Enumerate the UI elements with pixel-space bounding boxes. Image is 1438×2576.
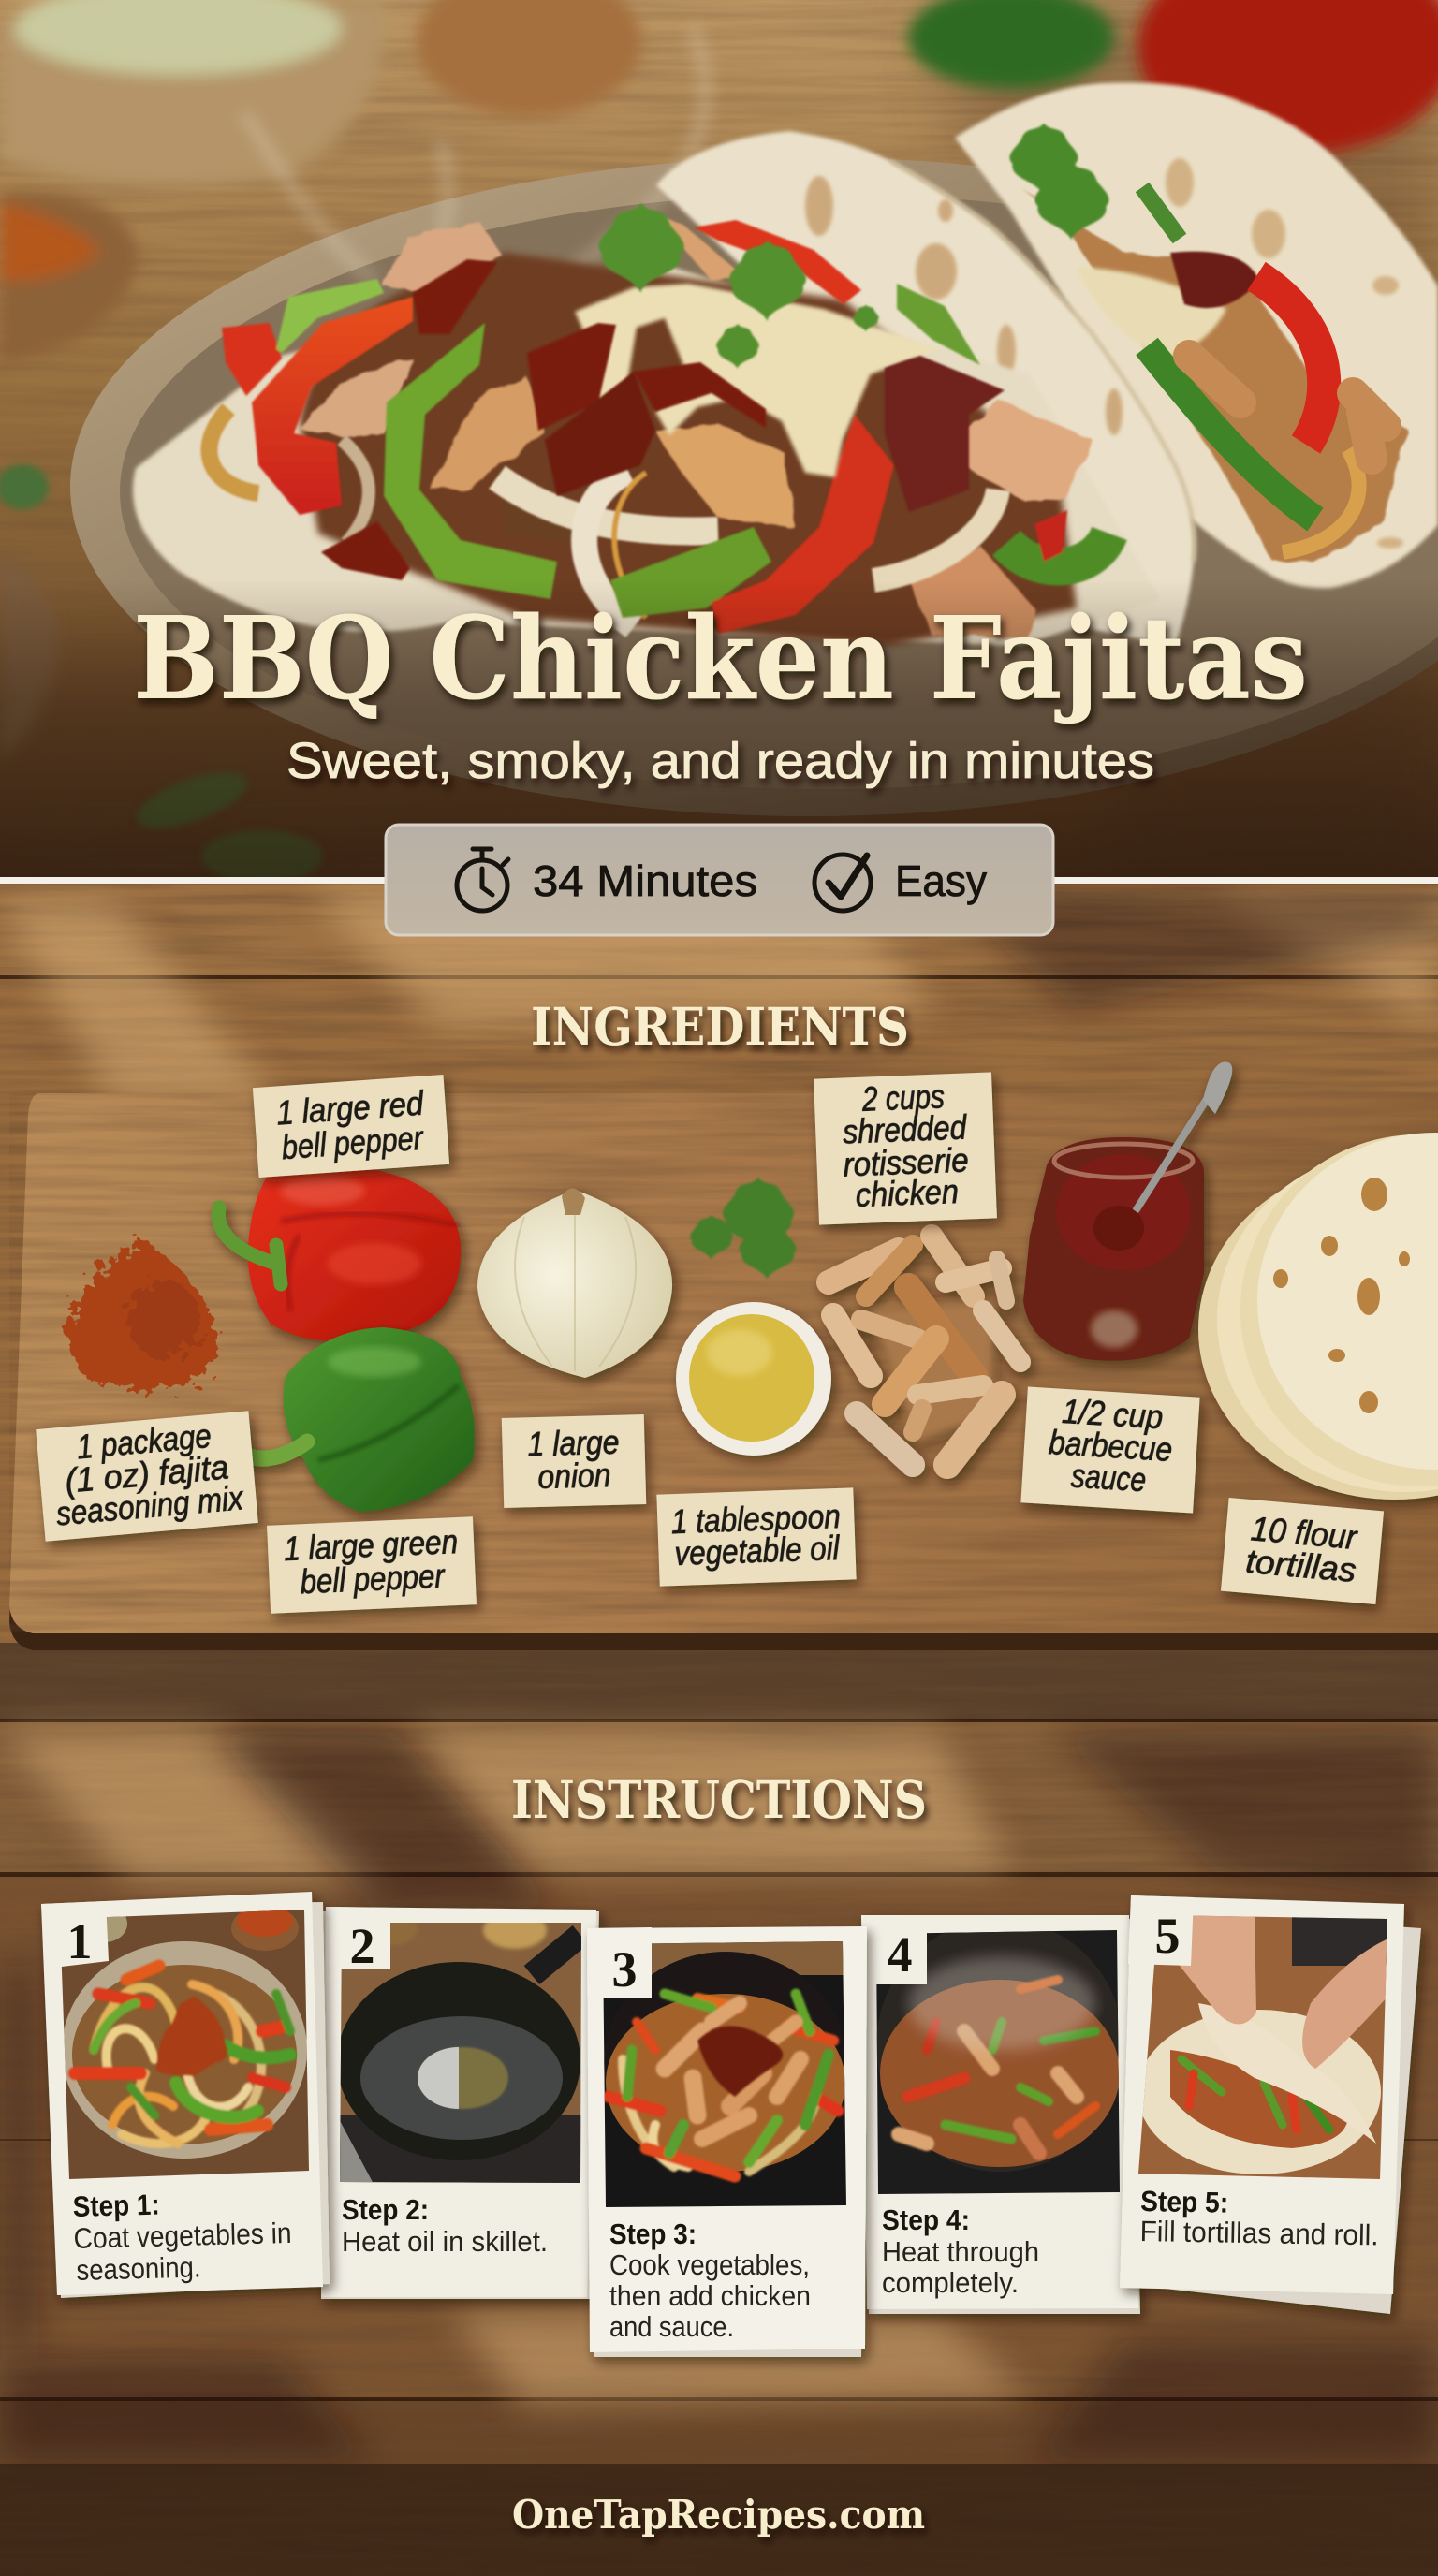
step 1 text: seasoning. [76,2250,201,2287]
icon: stopwatch [457,849,508,911]
panel: wood backdrop [0,880,1438,2576]
ingredient: shredded chicken [829,1236,1020,1465]
step 3 text: then add chicken [609,2279,811,2312]
subtitle: Sweet, smoky, and ready in minutes [286,733,1154,789]
divider line [0,877,1438,884]
step 1 text: Step 1: [72,2188,160,2223]
panel: cutting board [9,1093,1438,1650]
heading: instructions: INSTRUCTIONS [511,1769,927,1830]
note: flour tortillas: 10 flour [1250,1509,1360,1557]
note: onion [502,1414,646,1508]
step 3 text: Cook vegetables, [609,2248,810,2281]
step 2 text [342,2193,548,2258]
note: green bell pepper: 1 large green [283,1522,459,1568]
panel: step 5 card [1120,1895,1421,2314]
steam [243,28,705,374]
photo: chicken and sauce in pan [599,1938,850,2211]
chicken shreds [297,215,1093,637]
badge: time and difficulty [386,825,1053,935]
ingredient: fajita seasoning pile [66,1240,216,1391]
footer band [0,2464,1438,2576]
background props [0,0,1438,758]
cilantro garnish [598,203,879,369]
fajita filling [210,215,1109,646]
foreground leaves [0,464,323,883]
back tortilla taco [955,82,1438,588]
note: rotisserie chicken: shredded [842,1107,968,1151]
pepper stem [218,1208,281,1284]
panel: step 2 card [321,1907,599,2299]
note: rotisserie chicken: chicken [855,1172,960,1214]
photo: seasoned vegetables bowl [56,1905,314,2186]
note: fajita seasoning: (1 oz) fajita [64,1447,230,1500]
number 3: 3 [612,1941,637,1998]
sunlight streaks [0,889,1438,2406]
panel: step 3 card [587,1926,867,2357]
tag: number 4 [861,1915,927,1984]
spoon [1137,1086,1215,1209]
step 2 text: Heat oil in skillet. [342,2225,548,2258]
difficulty label: Easy [895,856,987,905]
ingredient: barbecue sauce jar [1023,1061,1232,1361]
note: fajita seasoning: seasoning mix [54,1478,246,1533]
ingredient: onion [477,1188,672,1378]
step 1 text [72,2185,293,2287]
photo: hot skillet [337,1911,585,2186]
ingredient: cilantro sprig [690,1178,796,1280]
note: flour tortillas [1221,1498,1384,1604]
photo: heating stew in skillet [871,1919,1123,2200]
note: fajita seasoning [36,1411,258,1542]
note: rotisserie chicken: 2 cups [860,1076,946,1119]
tag: number 1 [41,1901,109,1969]
photo: rolling tortilla [1133,1910,1395,2186]
note: green bell pepper [267,1516,477,1614]
step 5 text [1139,2185,1379,2251]
step 3 text: and sauce. [609,2310,734,2343]
number 5: 5 [1155,1908,1180,1964]
number 1: 1 [67,1913,92,1969]
note: green bell pepper: bell pepper [300,1557,447,1601]
panel: step 4 card [861,1915,1140,2314]
note: flour tortillas: tortillas [1244,1542,1357,1589]
note: barbecue sauce: barbecue [1048,1423,1173,1469]
ingredient: bowl of oil [676,1302,831,1456]
time label: 34 Minutes [533,856,757,905]
filling base [300,253,1077,646]
pepper stem [240,1437,307,1458]
tag: number 3 [587,1927,652,1998]
cheese [575,284,939,477]
note: rotisserie chicken: rotisserie [843,1140,969,1184]
bbq sauce [321,259,1005,580]
step 4 text: completely. [882,2266,1019,2299]
peppers [222,220,1109,634]
step 1 text: Coat vegetables in [73,2217,292,2255]
step 3 text: Step 3: [609,2217,697,2250]
front taco tortilla [133,131,1195,646]
note: red bell pepper: 1 large red [275,1084,425,1132]
step 2 text: Step 2: [342,2193,429,2226]
tag: number 5 [1128,1895,1194,1966]
footer brand text: OneTapRecipes.com [512,2492,925,2538]
title: BBQ Chicken Fajitas [133,591,1308,725]
ingredient: flour tortilla stack [1198,1133,1438,1500]
note: red bell pepper [253,1075,449,1178]
step 4 text [882,2203,1039,2299]
note: onion: 1 large [527,1423,620,1463]
step 4 text: Heat through [882,2235,1039,2268]
icon: check mark [814,855,871,911]
dark scrim [0,580,1438,880]
note: fajita seasoning: 1 package [75,1416,213,1466]
note: rotisserie chicken [814,1072,997,1225]
cilantro on back taco [1009,124,1109,241]
note: barbecue sauce [1020,1386,1200,1514]
note: vegetable oil [656,1487,857,1587]
ingredient: green bell pepper [240,1327,475,1512]
step 5 text: Fill tortillas and roll. [1139,2215,1379,2251]
tag: number 2 [326,1907,390,1969]
note: onion: onion [537,1456,611,1496]
step 3 text [609,2217,811,2343]
ingredient: red bell pepper [218,1162,461,1341]
step 4 text: Step 4: [882,2203,970,2236]
number 4: 4 [888,1926,912,1983]
onions [210,409,998,627]
number 2: 2 [350,1918,374,1974]
note: barbecue sauce: 1/2 cup [1061,1392,1165,1436]
note: vegetable oil: 1 tablespoon [670,1497,841,1541]
plate [70,157,1438,816]
note: barbecue sauce: sauce [1070,1456,1147,1499]
panel: step 1 card [41,1892,330,2298]
note: vegetable oil: vegetable oil [674,1529,841,1573]
heading: ingredients: INGREDIENTS [531,996,909,1057]
panel: hero photo [0,0,1438,883]
step 5 text: Step 5: [1140,2185,1228,2219]
note: red bell pepper: bell pepper [280,1119,426,1166]
